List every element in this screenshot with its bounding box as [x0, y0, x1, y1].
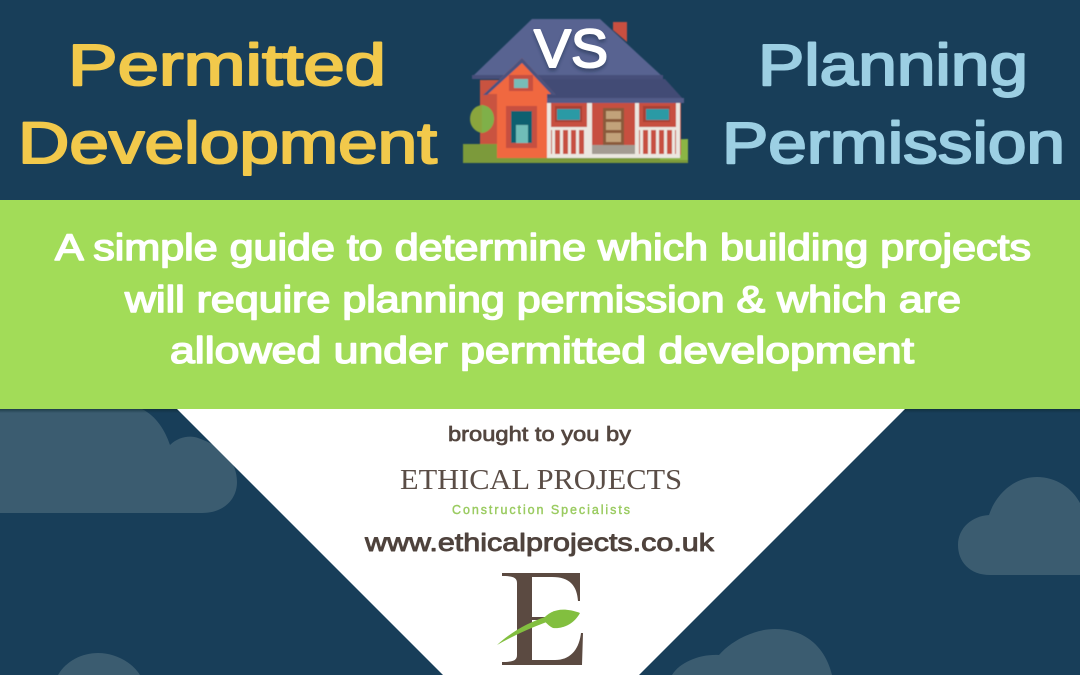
- banner text: [55, 227, 1031, 371]
- chimney: [613, 22, 627, 42]
- title: Planning Permission: [722, 33, 1065, 176]
- icon: house: [463, 19, 688, 163]
- text: brought to you by: brought to you by: [448, 424, 631, 446]
- porch step: [592, 145, 635, 154]
- VS label: VS: [534, 19, 608, 79]
- porch windows: [555, 106, 670, 122]
- triangle panel: sponsor: [177, 409, 905, 675]
- lower roof: [540, 79, 684, 100]
- banner text: A simple guide to determine which building projects: [55, 227, 1031, 268]
- text: website: www.ethicalprojects.co.uk: [364, 529, 715, 557]
- logo tagline: Construction Specialists: [452, 503, 630, 517]
- logo emblem: E with leaf: [497, 573, 583, 665]
- logo wordmark: Ethical Projects: ETHICAL PROJECTS: [400, 465, 682, 496]
- banner text: allowed under permitted development: [170, 330, 915, 371]
- banner text: will require planning permission & which are: [124, 279, 961, 320]
- porch railings and posts: [547, 103, 680, 158]
- lawn: [463, 139, 688, 163]
- cloud: right: [958, 477, 1080, 575]
- green banner: [0, 200, 1080, 409]
- entrance door: [506, 106, 537, 148]
- VS label: VS: [534, 22, 608, 82]
- title: Permitted Development: Development: [18, 111, 437, 176]
- letter E: [502, 573, 583, 665]
- cloud: bottom centre: [672, 629, 832, 675]
- title: Permitted Development: Permitted: [68, 33, 386, 98]
- upper roof: [472, 19, 663, 77]
- gable front: [484, 58, 555, 158]
- front door: [603, 108, 624, 145]
- leaf: [497, 610, 580, 645]
- gable window: [509, 75, 533, 91]
- side wall: [480, 80, 510, 144]
- cloud: bottom left: [58, 653, 140, 675]
- title: Planning Permission: Planning: [758, 33, 1028, 98]
- porch wall: [547, 103, 681, 155]
- banner shadow: [0, 409, 1080, 413]
- cloud: left: [0, 409, 237, 513]
- title: Planning Permission: Permission: [722, 111, 1065, 176]
- title: Permitted Development: [18, 33, 437, 176]
- gable roof edge: [483, 58, 556, 95]
- tree: [470, 105, 494, 133]
